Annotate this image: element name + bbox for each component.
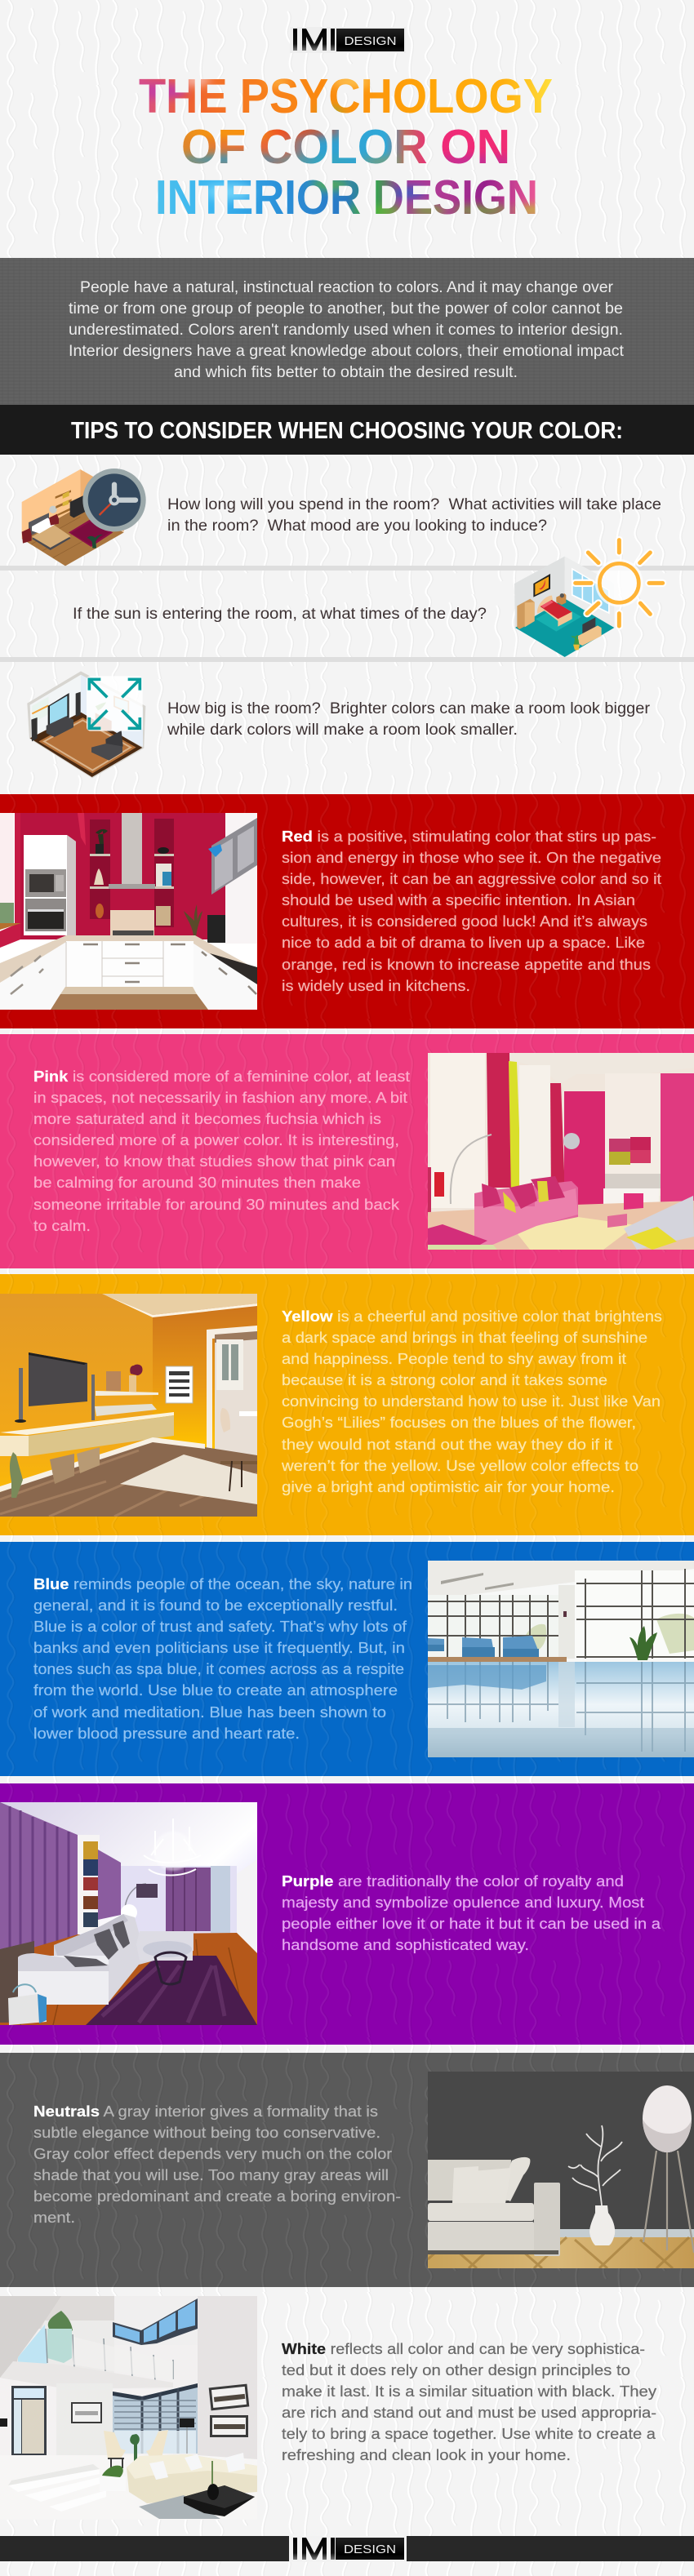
text: neutrals: become predominant and create a boring environ-	[33, 2188, 401, 2205]
text: neutrals: Neutrals A gray interior gives a formality that is	[33, 2103, 378, 2120]
panel: white	[0, 2296, 656, 2520]
panel: red	[0, 794, 694, 1028]
photo: yellow living room	[0, 1294, 257, 1517]
text: pink	[33, 1068, 410, 1234]
title: THE PSYCHOLOGY	[139, 69, 553, 123]
title	[139, 69, 553, 224]
tip texts: How big is the room? Brighter colors can make a room look bigger	[167, 700, 651, 717]
icon: bedroom with clock	[21, 469, 146, 566]
text: white: make it last. It is a similar situation with black. They	[282, 2383, 656, 2400]
panel: introduction: Interior designers have a great knowledge about colors, their emotional impact	[69, 343, 625, 360]
text: pink: more saturated and it becomes fuchsia which is	[33, 1111, 381, 1127]
text: pink: however, to know that studies show that pink can	[33, 1153, 395, 1170]
footer bar with logo: DESIGN	[344, 2543, 396, 2556]
text: pink: in spaces, not necessarily in fashion any more. A bit	[33, 1090, 407, 1106]
tip texts: in the room? What mood are you looking to induce?	[167, 517, 547, 535]
tip texts	[73, 496, 661, 739]
title: OF COLOR ON	[181, 120, 510, 174]
text: white: White reflects all color and can be very sophistica-	[282, 2341, 645, 2357]
panel: pink	[0, 1034, 694, 1268]
text: blue: lower blood pressure and heart rate.	[33, 1725, 300, 1742]
photo: gray room with white sofa	[428, 2072, 694, 2268]
text: red: is widely used in kitchens.	[282, 978, 470, 994]
text: yellow	[281, 1308, 662, 1495]
panel: introduction: underestimated. Colors aren't randomly used when it comes to interior design.	[69, 322, 623, 339]
icon: bedroom with sun	[514, 536, 666, 657]
photo: purple living room	[0, 1802, 257, 2025]
text: neutrals: ment.	[33, 2210, 75, 2226]
text: red: should be used with a specific intention. In Asian	[282, 892, 635, 908]
text: blue: tones such as spa blue, it comes across as a respite	[33, 1661, 404, 1677]
photo: pink living room	[428, 1053, 694, 1250]
panel: purple	[0, 1783, 694, 2045]
text: yellow: Yellow is a cheerful and positive color that brightens	[282, 1308, 662, 1325]
photo: red kitchen	[0, 813, 257, 1010]
text: red: nice to add a bit of drama to liven up a space. Like	[282, 935, 645, 951]
text: yellow: because it is a strong color and it takes some	[282, 1372, 607, 1388]
heading: tips	[0, 405, 694, 455]
panel: introduction: time or from one group of people to another, but the power of color cannot be	[69, 300, 623, 318]
tip texts: How long will you spend in the room? What activities will take place	[167, 496, 661, 513]
panel: introduction: and which fits better to obtain the desired result.	[174, 364, 518, 381]
photo: white two-storey room	[0, 2296, 257, 2520]
text: yellow: they would not stand out the way they do if it	[282, 1437, 612, 1453]
text: neutrals: shade that you will use. Too many gray areas will	[33, 2167, 389, 2183]
text: white: tely to bring a space together. Use white to create a	[282, 2426, 656, 2442]
text: red	[282, 828, 661, 994]
text: neutrals	[33, 2103, 401, 2226]
tip texts: If the sun is entering the room, at what times of the day?	[73, 606, 487, 623]
text: pink: Pink is considered more of a feminine color, at least	[33, 1068, 410, 1085]
tip texts: while dark colors will make a room look smaller.	[167, 722, 518, 739]
panel: introduction	[0, 258, 694, 405]
text: blue: banks and even politicians use it frequently. But, in	[33, 1640, 405, 1656]
text: blue: Blue is a color of trust and safety. That’s why lots of	[33, 1619, 407, 1635]
text: white: ted but it does rely on other design principles to	[282, 2362, 630, 2378]
text: white	[282, 2341, 656, 2463]
logo: IMI Design (top)	[290, 27, 406, 53]
text: purple	[282, 1873, 661, 1953]
text: yellow: a dark space and brings in that feeling of sunshine	[282, 1330, 647, 1346]
panel: neutrals	[0, 2053, 694, 2287]
text: blue: Blue reminds people of the ocean, the sky, nature in	[33, 1576, 412, 1592]
heading: tips: TIPS TO CONSIDER WHEN CHOOSING YOUR COLOR:	[71, 418, 623, 444]
text: yellow: weren’t for the yellow. Use yellow color effects to	[281, 1458, 638, 1474]
text: blue	[33, 1576, 412, 1742]
text: red: sion and energy in those who see it. On the negative	[282, 850, 661, 866]
text: yellow: and happiness. People tend to shy away from it	[282, 1351, 626, 1367]
text: red: cultures, it is considered good luck! And it’s always	[282, 913, 647, 930]
text: pink: be calming for around 30 minutes then make	[33, 1175, 361, 1191]
text: blue: from the world. Use blue to create an atmosphere	[33, 1682, 398, 1699]
text: pink: considered more of a power color. It is interesting,	[33, 1132, 399, 1148]
text: red: Red is a positive, stimulating color that stirs up pas-	[282, 828, 656, 845]
text: red: side, however, it can be an aggressive color and so it	[282, 871, 661, 887]
text: neutrals: subtle elegance without being too conservative.	[33, 2125, 380, 2141]
photo: blue hall with pool	[428, 1561, 694, 1757]
text: red: orange, red is known to increase appetite and thus	[282, 957, 651, 973]
text: purple: handsome and sophisticated way.	[282, 1937, 529, 1953]
text: blue: of work and meditation. Blue has been shown to	[33, 1704, 386, 1721]
logo: IMI Design (top): DESIGN	[345, 34, 397, 48]
title: INTERIOR DESIGN	[155, 171, 538, 224]
panel: blue	[0, 1542, 694, 1776]
text: neutrals: Gray color effect depends very much on the color	[33, 2146, 392, 2162]
text: purple: people either love it or hate it but it can be used in a	[282, 1916, 661, 1932]
text: purple: Purple are traditionally the color of royalty and	[282, 1873, 624, 1890]
text: yellow: give a bright and optimistic air for your home.	[282, 1479, 615, 1495]
text: yellow: convincing to understand how to use it. Just like Van	[282, 1393, 661, 1410]
text: white: are rich and stand out and must be used appropria-	[282, 2405, 656, 2421]
text: white: refreshing and clean look in your home.	[282, 2447, 571, 2463]
text: pink: to calm.	[33, 1218, 91, 1234]
text: blue: general, and it is found to be exceptionally restful.	[33, 1597, 398, 1614]
icon: living room with expand arrows	[27, 671, 145, 779]
text: pink: someone irritable for around 30 minutes and back	[33, 1197, 400, 1213]
panel: introduction: People have a natural, instinctual reaction to colors. And it may change over	[80, 279, 614, 296]
footer bar with logo	[0, 2536, 694, 2562]
panel: yellow	[0, 1274, 694, 1535]
text: yellow: Gogh’s “Lilies” focuses on the blues of the flower,	[282, 1415, 636, 1431]
text: purple: majesty and symbolize opulence and luxury. Most	[282, 1894, 644, 1911]
